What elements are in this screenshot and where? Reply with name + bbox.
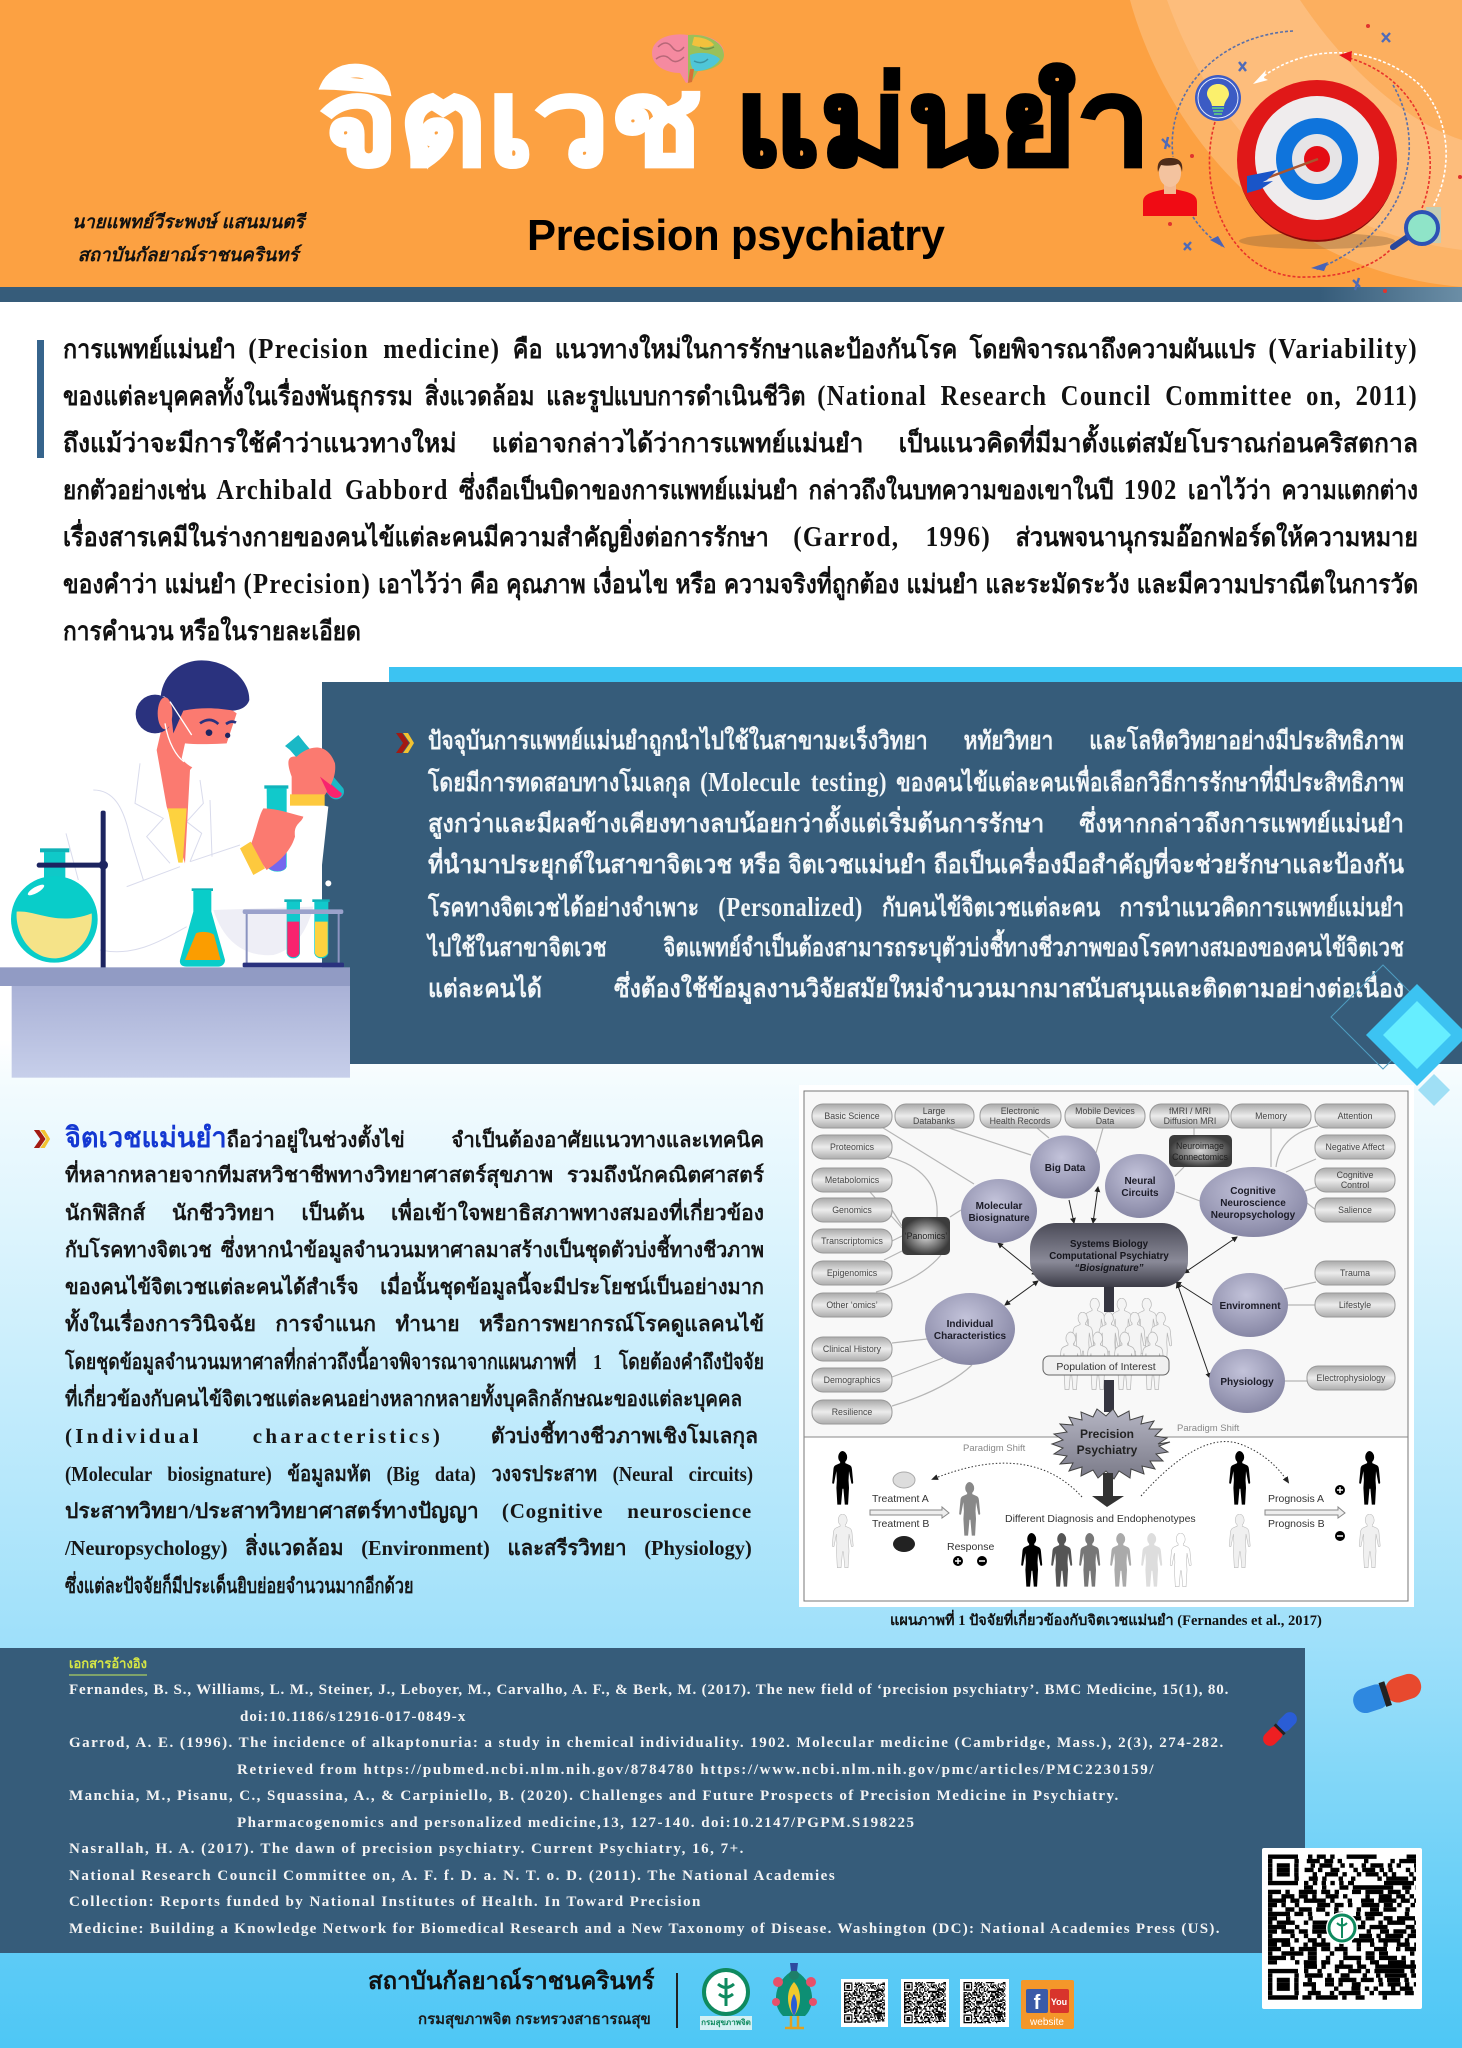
icon: chevron bullet xyxy=(34,1130,50,1148)
person icon xyxy=(1143,158,1197,216)
source pills top row and right column: Salience xyxy=(1338,1205,1372,1215)
stand xyxy=(101,811,106,972)
target xyxy=(1237,80,1397,242)
text block: precision psychiatry description: ของคนไข้จิตเวชแต่ละคนได้สำเร็จ เมื่อนั้นชุดข้อมูลนี้จะมีประโยชน์เป็นอย่างมาก xyxy=(65,1275,764,1299)
subtitle: Precision psychiatry xyxy=(527,212,945,260)
title: black part: แม่นยำ xyxy=(734,55,1151,191)
text block: intro paragraph: ของแต่ละบุคคลทั้งในเรื่องพันธุกรรม สิ่งแวดล้อม และรูปแบบการดำเนินชีวิต (National Research Council Committee on, 2011) xyxy=(63,381,1418,412)
source pills top row and right column: Electrophysiology xyxy=(1317,1373,1386,1383)
systems biology node: Computational Psychiatry xyxy=(1049,1251,1169,1262)
source pills left column: Transcriptomics xyxy=(821,1236,883,1246)
text block: precision psychiatry description: ทั้งในเรื่องการวินิจฉัย การจำแนก ทำนาย หรือการพยากรณ์โรคดูแลคนไข้ xyxy=(65,1312,764,1336)
text block: precision psychiatry description: (Molecular biosignature) ข้อมูลมหัต (Big data) วงจรประสาท (Neural circuits) xyxy=(65,1462,753,1486)
text block: precision psychiatry description: ประสาทวิทยา/ประสาทวิทยาศาสตร์ทางปัญญา (Cognitive neuroscience xyxy=(65,1499,752,1523)
author: นายแพทย์วีระพงษ์ แสนมนตรี xyxy=(72,211,304,232)
source pills top row and right column: fMRI / MRI xyxy=(1169,1106,1211,1116)
upper tube and hand xyxy=(285,735,344,799)
prognosis section xyxy=(1229,1451,1380,1568)
neck xyxy=(157,707,207,863)
factor circles: Big Data xyxy=(1045,1163,1086,1174)
diamond decoration xyxy=(1330,964,1462,1106)
icon: brain xyxy=(652,34,724,83)
connector lines xyxy=(870,1126,1318,1406)
table xyxy=(0,967,350,986)
text block: intro paragraph: ถึงแม้ว่าจะมีการใช้คำว่าแนวทางใหม่ แต่อาจกล่าวได้ว่าการแพทย์แม่นยำ เป็นแนวคิดที่มีมาตั้งแต่สมัยโบราณก่อนคริสตกาล xyxy=(63,429,1418,458)
icon: large QR code xyxy=(1262,1848,1422,2009)
text block: precision psychiatry description: ที่หลากหลายจากทีมสหวิชาชีพทางวิทยาศาสตร์สุขภาพ รวมถึงนักคณิตศาสตร์ xyxy=(65,1163,764,1187)
header background with target illustration xyxy=(0,0,1462,302)
text block: panel paragraph xyxy=(426,725,1404,1004)
author xyxy=(72,211,307,265)
text block: precision psychiatry description: ที่เกี่ยวข้องกับคนไข้จิตเวชแต่ละคนอย่างหลากหลายทั้งบุคลิกลักษณะของแต่ละบุคคล xyxy=(65,1387,742,1411)
text block: precision psychiatry description: นักฟิสิกส์ นักชีววิทยา เป็นต้น เพื่อเข้าใจพยาธิสภาพทางสมองที่เกี่ยวข้อง xyxy=(65,1201,764,1225)
website badge xyxy=(1021,1980,1074,2029)
references list: Pharmacogenomics and personalized medicine,13, 127-140. doi:10.2147/PGPM.S198225 xyxy=(237,1815,915,1831)
light bulb icon xyxy=(1195,75,1241,121)
logo: department of mental health xyxy=(700,1968,752,2030)
panomics and neuroimage boxes xyxy=(902,1135,1232,1255)
source pills left column: Genomics xyxy=(832,1205,872,1215)
lower tube and hand xyxy=(264,785,288,789)
population label: Population of Interest xyxy=(1056,1361,1156,1373)
panel: current applications xyxy=(322,682,1462,1064)
accent bar beside intro xyxy=(37,340,44,458)
header banner xyxy=(0,0,1462,302)
text block: panel paragraph: สูงกว่าและมีผลข้างเคียงทางลบน้อยกว่าตั้งแต่เริ่มต้นการรักษา ซึ่งหากกล่าวถึงการแพทย์แม่นยำ xyxy=(428,811,1404,838)
source pills top row and right column: Attention xyxy=(1338,1111,1372,1121)
illustration: scientist in lab xyxy=(0,660,350,1078)
treatment section xyxy=(832,1451,994,1568)
text block: panel paragraph: ที่นำมาประยุกต์ในสาขาจิตเวช หรือ จิตเวชแม่นยำ ถือเป็นเครื่องมือสำคัญที่จะช่วยรักษาและป้องกัน xyxy=(428,852,1404,879)
double arrows xyxy=(998,1187,1237,1378)
factor circles: Neuroscience xyxy=(1220,1198,1286,1209)
text block: panel paragraph: โดยมีการทดสอบทางโมเลกุล (Molecule testing) ของคนไข้แต่ละคนเพื่อเลือกวิธีการรักษาที่มีประสิทธิภาพ xyxy=(428,767,1404,797)
text block: panel paragraph: ไปใช้ในสาขาจิตเวช จิตแพทย์จำเป็นต้องสามารถระบุตัวบ่งชี้ทางชีวภาพของโรคทางสมองของคนไข้จิตเวช xyxy=(428,935,1404,962)
title: white part: จิตเวช xyxy=(319,55,702,191)
text block: panel paragraph: ปัจจุบันการแพทย์แม่นยำถูกนำไปใช้ในสาขามะเร็งวิทยา หทัยวิทยา และโลหิตวิทยาอย่างมีประสิทธิภาพ xyxy=(428,728,1404,755)
source pills top row and right column: Control xyxy=(1341,1180,1369,1190)
icon: chevron bullet xyxy=(396,733,414,753)
round flask xyxy=(40,848,69,852)
source pills top row and right column: Cognitive xyxy=(1337,1170,1373,1180)
text block: intro paragraph: การแพทย์แม่นยำ (Precision medicine) คือ แนวทางใหม่ในการรักษาและป้องกันโรค โดยพิจารณาถึงความผันแปร (Variability) xyxy=(63,334,1418,365)
factor circles: Individual xyxy=(947,1319,994,1330)
references list: Nasrallah, H. A. (2017). The dawn of precision psychiatry. Current Psychiatry, 16, 7+. xyxy=(69,1841,745,1857)
text block: intro paragraph: การคำนวน หรือในรายละเอียด xyxy=(63,617,361,646)
website badge: You xyxy=(1051,1997,1067,2007)
hair and face xyxy=(136,695,174,733)
paradigm shift labels: Paradigm Shift xyxy=(963,1443,1026,1454)
logo: peacock xyxy=(772,1963,817,2030)
factor circles: Circuits xyxy=(1121,1188,1159,1199)
source pills left column: Proteomics xyxy=(830,1142,875,1152)
panomics and neuroimage boxes: ‘Panomics’ xyxy=(905,1231,947,1241)
precision psychiatry star xyxy=(1052,1409,1170,1479)
icon: small capsule xyxy=(1263,1712,1297,1746)
paradigm shift labels: Paradigm Shift xyxy=(1177,1423,1240,1434)
text block: intro paragraph xyxy=(63,334,1418,646)
source pills left column xyxy=(812,1104,892,1424)
source pills top row and right column: Electronic xyxy=(1001,1106,1040,1116)
text block: precision psychiatry description: (Individual characteristics) ตัวบ่งชี้ทางชีวภาพเชิงโมเลกุล xyxy=(65,1424,758,1448)
treatment section: Treatment A xyxy=(872,1493,929,1505)
text block: intro paragraph: ของคำว่า แม่นยำ (Precision) เอาไว้ว่า คือ คุณภาพ เงื่อนไข หรือ ความจริงที่ถูกต้อง แม่นยำ และระมัดระวัง และมีความปราณีตในการวัด xyxy=(63,569,1418,600)
text block: intro paragraph: เรื่องสารเคมีในร่างกายของคนไข้แต่ละคนมีความสำคัญยิ่งต่อการรักษา (Garrod, 1996) ส่วนพจนานุกรมอ๊อกฟอร์ดให้ความหมาย xyxy=(63,522,1418,553)
source pills top row and right column: Lifestyle xyxy=(1339,1300,1371,1310)
source pills left column: Metabolomics xyxy=(825,1175,880,1185)
references list: National Research Council Committee on, A. F. f. D. a. N. T. o. D. (2011). The National Academies xyxy=(69,1868,836,1884)
central shaft xyxy=(1104,1287,1114,1412)
references heading xyxy=(69,1654,147,1676)
references list: Fernandes, B. S., Williams, L. M., Steiner, J., Leboyer, M., Carvalho, A. F., & Berk, M. (2017). The new field of ‘precision psychiatry’. BMC Medicine, 15(1), 80. xyxy=(69,1682,1229,1698)
QR code: footer 2 xyxy=(901,1979,949,2027)
systems biology node: “Biosignature” xyxy=(1075,1263,1144,1274)
source pills left column: Epigenomics xyxy=(827,1268,878,1278)
precision psychiatry star: Precision xyxy=(1080,1427,1134,1441)
text block: precision psychiatry description: /Neuropsychology) สิ่งแวดล้อม (Environment) และสรีรวิทยา (Physiology) xyxy=(65,1536,752,1560)
population label xyxy=(1043,1356,1169,1375)
references heading: เอกสารอ้างอิง xyxy=(69,1656,147,1671)
source pills left column: Demographics xyxy=(824,1375,881,1385)
text block: precision psychiatry description xyxy=(64,1123,764,1598)
precision psychiatry star: Psychiatry xyxy=(1077,1443,1138,1457)
footer separator xyxy=(676,1973,678,2028)
source pills left column: Basic Science xyxy=(824,1111,880,1121)
text block: precision psychiatry description: กับโรคทางจิตเวช ซึ่งหากนำข้อมูลจำนวนมหาศาลมาสร้างเป็นชุดตัวบ่งชี้ทางชีวภาพ xyxy=(65,1238,764,1262)
systems biology node: Systems Biology xyxy=(1070,1239,1149,1250)
factor circles xyxy=(925,1136,1308,1413)
prognosis section: Prognosis A xyxy=(1268,1493,1324,1505)
footer organization name: สถาบันกัลยาณ์ราชนครินทร์ xyxy=(368,1968,654,1995)
references list xyxy=(69,1682,1229,1937)
text block: panel paragraph: แต่ละคนได้ ซึ่งต้องใช้ข้อมูลงานวิจัยสมัยใหม่จำนวนมากมาสนับสนุนและติดตามอย่างต่อเนื่อง xyxy=(428,976,1404,1003)
text block: precision psychiatry description: จิตเวชแม่นยำถือว่าอยู่ในช่วงตั้งไข่ จำเป็นต้องอาศัยแนวทางและเทคนิค xyxy=(65,1123,764,1154)
factor circles: Biosignature xyxy=(968,1213,1030,1224)
chart: figure 1 precision psychiatry diagram xyxy=(799,1085,1414,1607)
population of interest crowd xyxy=(1060,1298,1172,1390)
factor circles: Cognitive xyxy=(1230,1186,1276,1197)
factor circles: Characteristics xyxy=(934,1331,1007,1342)
figure caption: แผนภาพที่ 1 ปัจจัยที่เกี่ยวข้องกับจิตเวชแม่นยำ (Fernandes et al., 2017) xyxy=(890,1613,1322,1629)
author: สถาบันกัลยาณ์ราชนครินทร์ xyxy=(78,244,298,265)
lab coat xyxy=(67,753,328,968)
source pills top row and right column: Health Records xyxy=(990,1116,1051,1126)
tube rack xyxy=(247,912,339,963)
source pills left column: Other ‘omics’ xyxy=(826,1300,878,1310)
systems biology node xyxy=(1030,1223,1188,1287)
conical flask xyxy=(192,888,213,891)
source pills top row and right column: Memory xyxy=(1255,1111,1287,1121)
endophenotype figures xyxy=(1005,1513,1196,1587)
references list: doi:10.1186/s12916-017-0849-x xyxy=(240,1709,466,1725)
source pills left column: Clinical History xyxy=(823,1344,882,1354)
panel: references xyxy=(0,1648,1305,1953)
source pills top row and right column: Diffusion MRI xyxy=(1164,1116,1216,1126)
source pills top row and right column: Negative Affect xyxy=(1325,1142,1385,1152)
prognosis section: Prognosis B xyxy=(1268,1518,1325,1530)
icon: big capsule xyxy=(1353,1674,1422,1713)
references list: Retrieved from https://pubmed.ncbi.nlm.nih.gov/8784780 https://www.ncbi.nlm.nih.gov/pmc/articles/PMC2230159/ xyxy=(237,1762,1155,1778)
figure frame xyxy=(799,1085,1414,1607)
factor circles: Neural xyxy=(1124,1176,1156,1187)
paradigm shift labels xyxy=(963,1423,1240,1454)
source pills left column: Resilience xyxy=(832,1407,872,1417)
cyan strip above panel xyxy=(389,667,1462,682)
references list: Manchia, M., Pisanu, C., Squassina, A., & Carpiniello, B. (2020). Challenges and Future Prospects of Precision Medicine in Psychiatry. xyxy=(69,1788,1120,1804)
QR code: footer 1 xyxy=(841,1979,888,2027)
text block: intro paragraph: ยกตัวอย่างเช่น Archibald Gabbord ซึ่งถือเป็นบิดาของการแพทย์แม่นยำ กล่าวถึงในบทความของเขาในปี 1902 เอาไว้ว่า ความแตกต่าง xyxy=(63,475,1418,506)
references list: Garrod, A. E. (1996). The incidence of alkaptonuria: a study in chemical individuality. 1902. Molecular medicine (Cambridge, Mass.), 2(3), 274-282. xyxy=(69,1735,1225,1751)
source pills top row and right column: Data xyxy=(1096,1116,1114,1126)
website badge: website xyxy=(1029,2017,1064,2028)
source pills top row and right column xyxy=(895,1104,1395,1390)
text block: panel paragraph: โรคทางจิตเวชได้อย่างจำเพาะ (Personalized) กับคนไข้จิตเวชแต่ละคน การนำแนวคิดการแพทย์แม่นยำ xyxy=(428,892,1404,922)
factor circles: Molecular xyxy=(976,1201,1022,1212)
big down arrow xyxy=(1092,1473,1124,1507)
references list: Medicine: Building a Knowledge Network for Biomedical Research and a New Taxonomy of Disease. Washington (DC): National Academies Press (US). xyxy=(69,1921,1221,1937)
source pills top row and right column: Large xyxy=(923,1106,945,1116)
references list: Collection: Reports funded by National Institutes of Health. In Toward Precision xyxy=(69,1894,702,1910)
logo: department of mental health: กรมสุขภาพจิต xyxy=(701,2018,751,2028)
factor circles: Enviromnent xyxy=(1219,1301,1281,1312)
magnifier icon xyxy=(1393,207,1441,247)
website badge: f xyxy=(1034,1992,1041,2014)
text block: precision psychiatry description: โดยชุดข้อมูลจำนวนมหาศาลที่กล่าวถึงนี้อาจพิจารณาจากแผนภาพที่ 1 โดยต้องคำถึงปัจจัย xyxy=(65,1350,764,1374)
source pills top row and right column: Mobile Devices xyxy=(1075,1106,1135,1116)
factor circles: Neuropsychology xyxy=(1211,1210,1296,1221)
panomics and neuroimage boxes: Connectomics xyxy=(1172,1152,1228,1162)
source pills top row and right column: Databanks xyxy=(913,1116,956,1126)
treatment section: Treatment B xyxy=(872,1518,929,1530)
QR code: footer 3 xyxy=(960,1979,1009,2027)
text block: precision psychiatry description: ซึ่งแต่ละปัจจัยก็มีประเด็นยิบย่อยจำนวนมากอีกด้วย xyxy=(65,1574,413,1598)
factor circles: Physiology xyxy=(1220,1377,1274,1388)
dotted arcs xyxy=(933,1442,1288,1497)
source pills top row and right column: Trauma xyxy=(1340,1268,1370,1278)
endophenotype figures: Different Diagnosis and Endophenotypes xyxy=(1005,1513,1196,1525)
treatment section: Response xyxy=(947,1541,994,1553)
footer department: กรมสุขภาพจิต กระทรวงสาธารณสุข xyxy=(418,2011,651,2028)
panomics and neuroimage boxes: Neuroimage xyxy=(1176,1141,1224,1151)
